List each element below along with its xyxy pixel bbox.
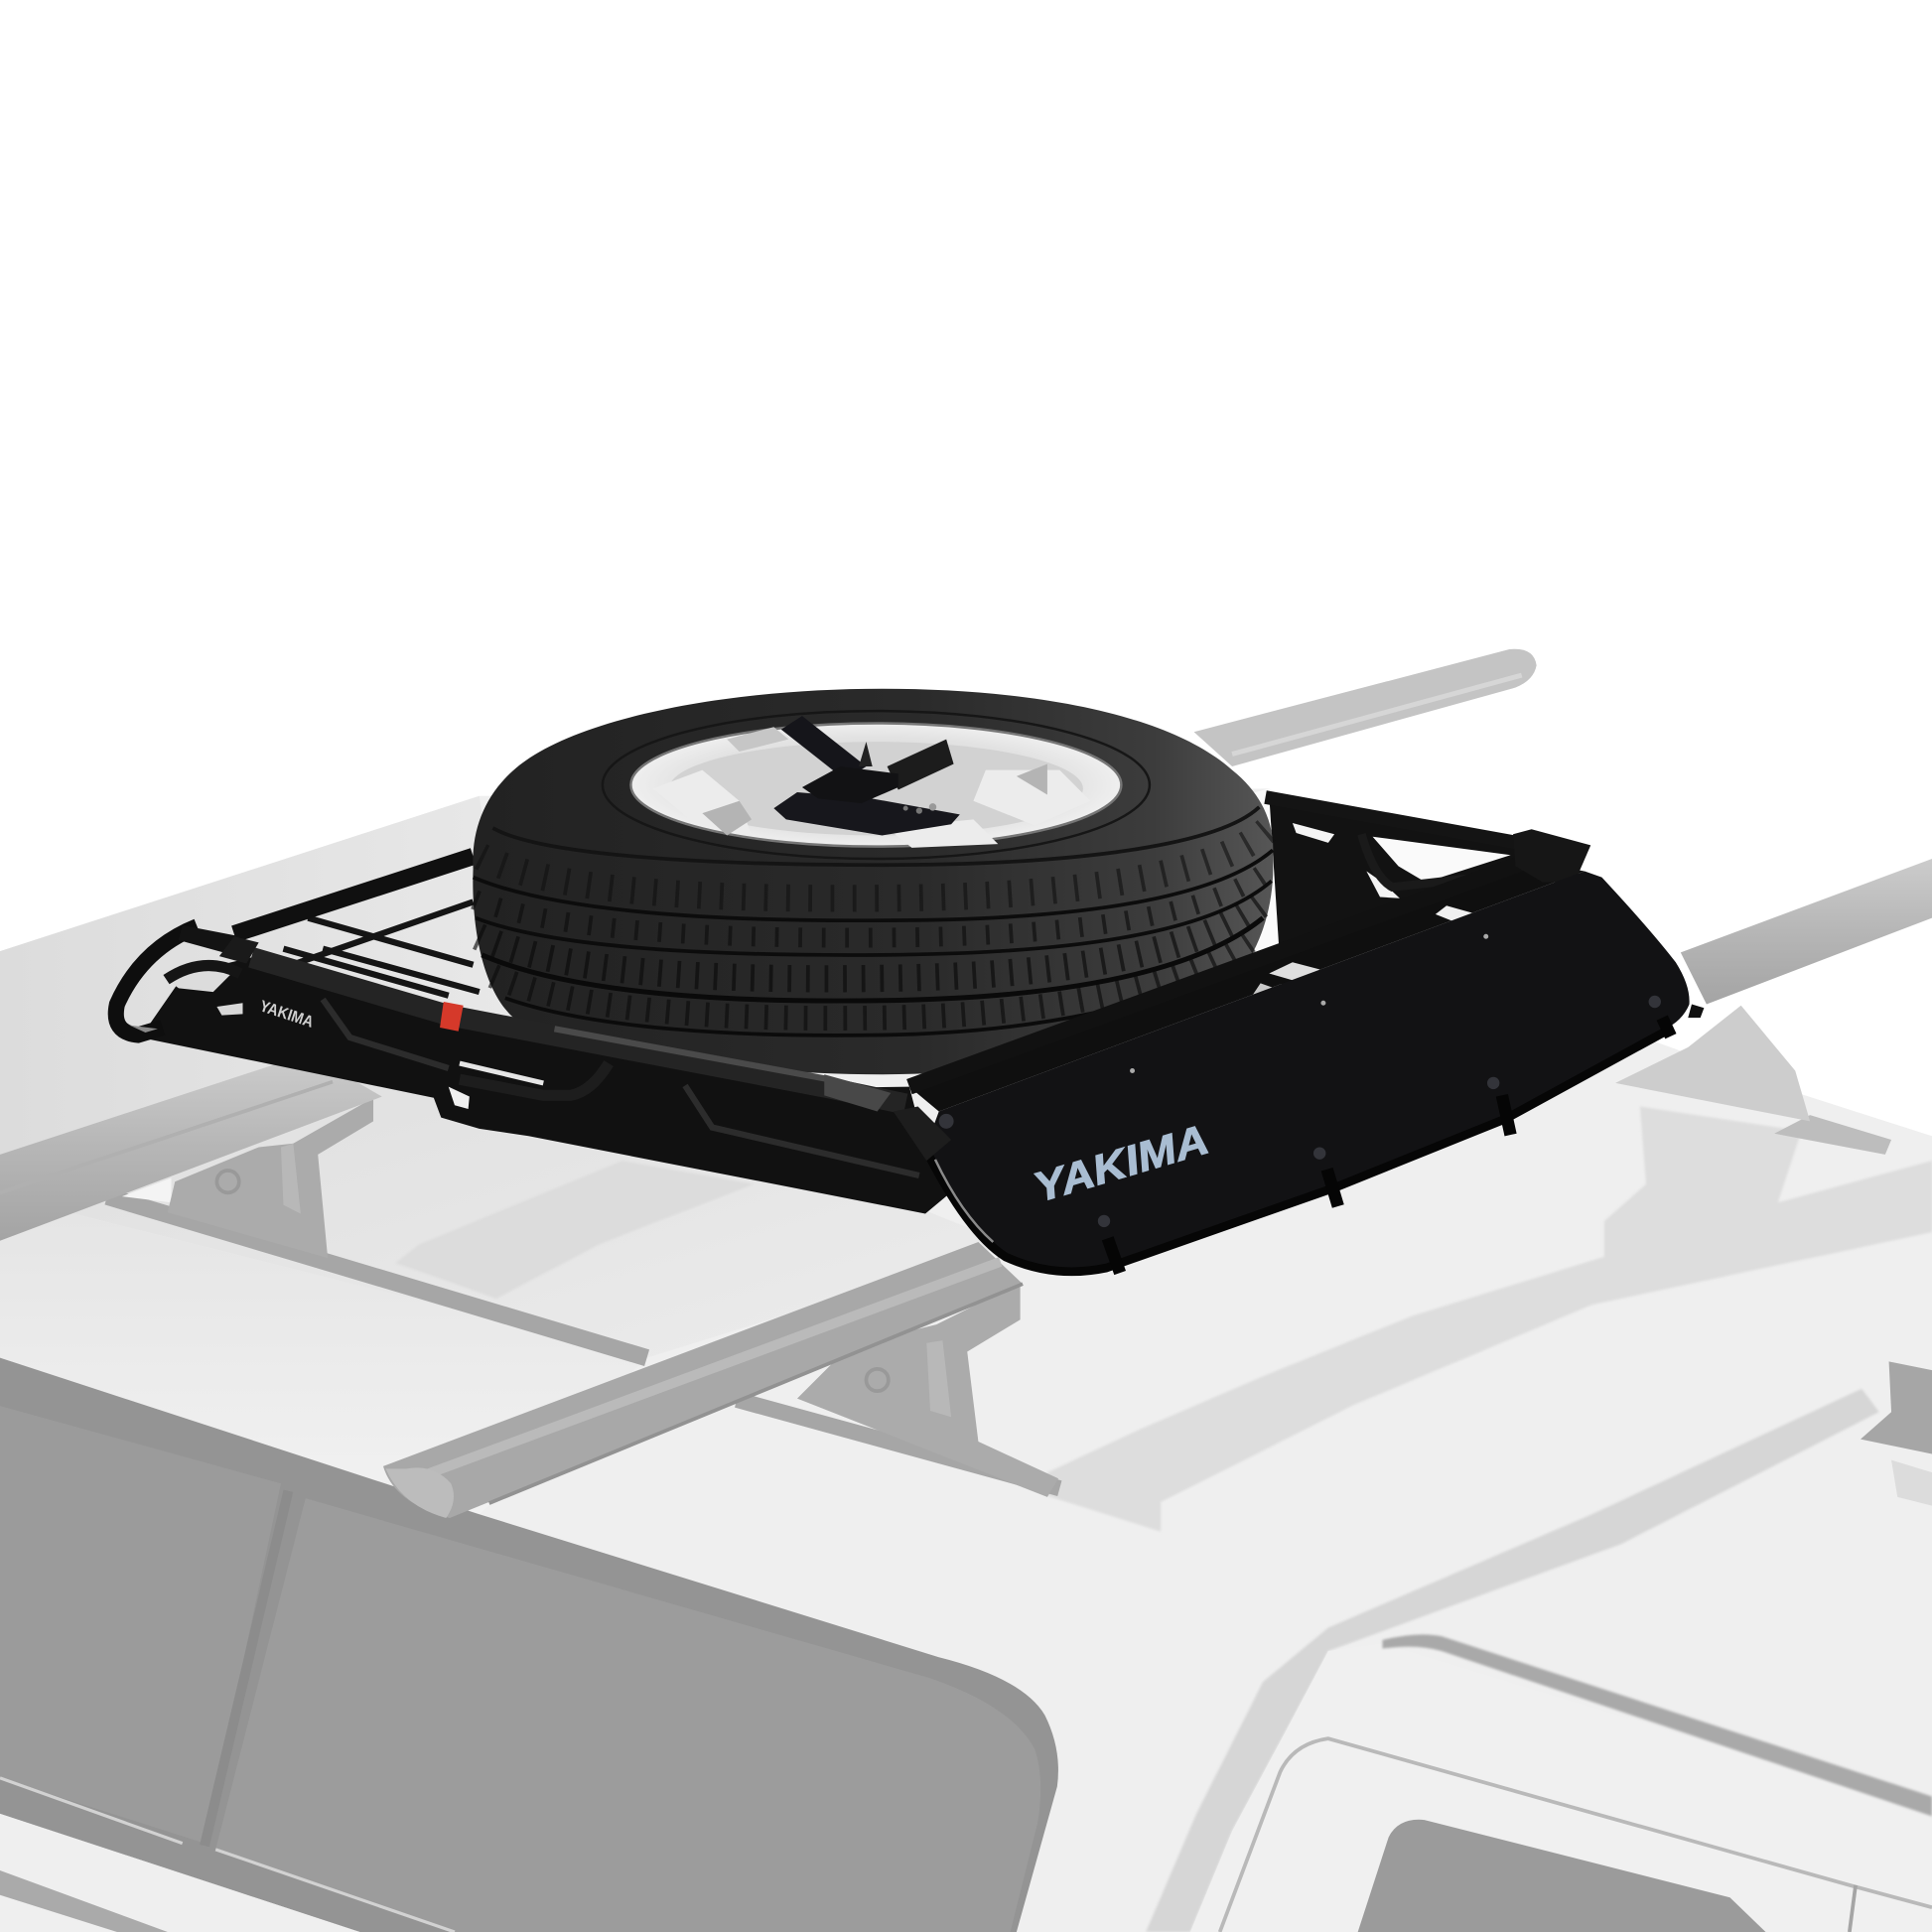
- rack basket body: [116, 926, 955, 1213]
- panel fasteners: [939, 934, 1661, 1227]
- a-pillar band: [1146, 1389, 1879, 1932]
- hook: [460, 1063, 609, 1095]
- cab window: [1358, 1820, 1765, 1932]
- rear right rail: [1266, 797, 1518, 843]
- panel straps: [1108, 1018, 1671, 1273]
- right rail and bracket: [909, 829, 1590, 1087]
- roof rails and mounting feet: [107, 1006, 1891, 1497]
- roof shading bands: [395, 1161, 755, 1299]
- sidewall and tread grooves: [474, 711, 1273, 1035]
- dark floor below right rail: [909, 862, 1585, 1111]
- rear left rail: [234, 857, 474, 934]
- gray rail bracket: [824, 1074, 891, 1111]
- mesh bars: [283, 901, 480, 996]
- logo: YAKIMA: YAKIMA: [1028, 1116, 1214, 1211]
- front crossbar: [383, 1242, 1023, 1518]
- small logo: YAKIMA: [257, 997, 316, 1032]
- tire body: [473, 689, 1273, 1074]
- foot: front left: [168, 1098, 373, 1258]
- left loop: [116, 926, 198, 1035]
- rear crossbar: [0, 649, 1932, 1241]
- vehicle roof: [0, 788, 1932, 1932]
- front side rail with red band: [179, 925, 905, 1111]
- foot: front right: [797, 1283, 1058, 1497]
- wind deflector panel: [894, 871, 1704, 1273]
- spare tire: [473, 689, 1273, 1074]
- rack rear section behind tire: [234, 794, 1528, 996]
- center mount bracket: [773, 716, 960, 835]
- side windows: [0, 1358, 1058, 1932]
- cab and windshield area: [1146, 1361, 1932, 1932]
- hole in left frame: [164, 964, 231, 992]
- door and cab panel: [1190, 1644, 1932, 1932]
- red band: [440, 1002, 464, 1032]
- foot: rear right: [1615, 1006, 1891, 1155]
- basket ridges: [323, 1000, 919, 1175]
- right edge foot: [1861, 1361, 1932, 1453]
- wheel rim: [630, 724, 1121, 848]
- white gaps behind rack: [1293, 823, 1334, 843]
